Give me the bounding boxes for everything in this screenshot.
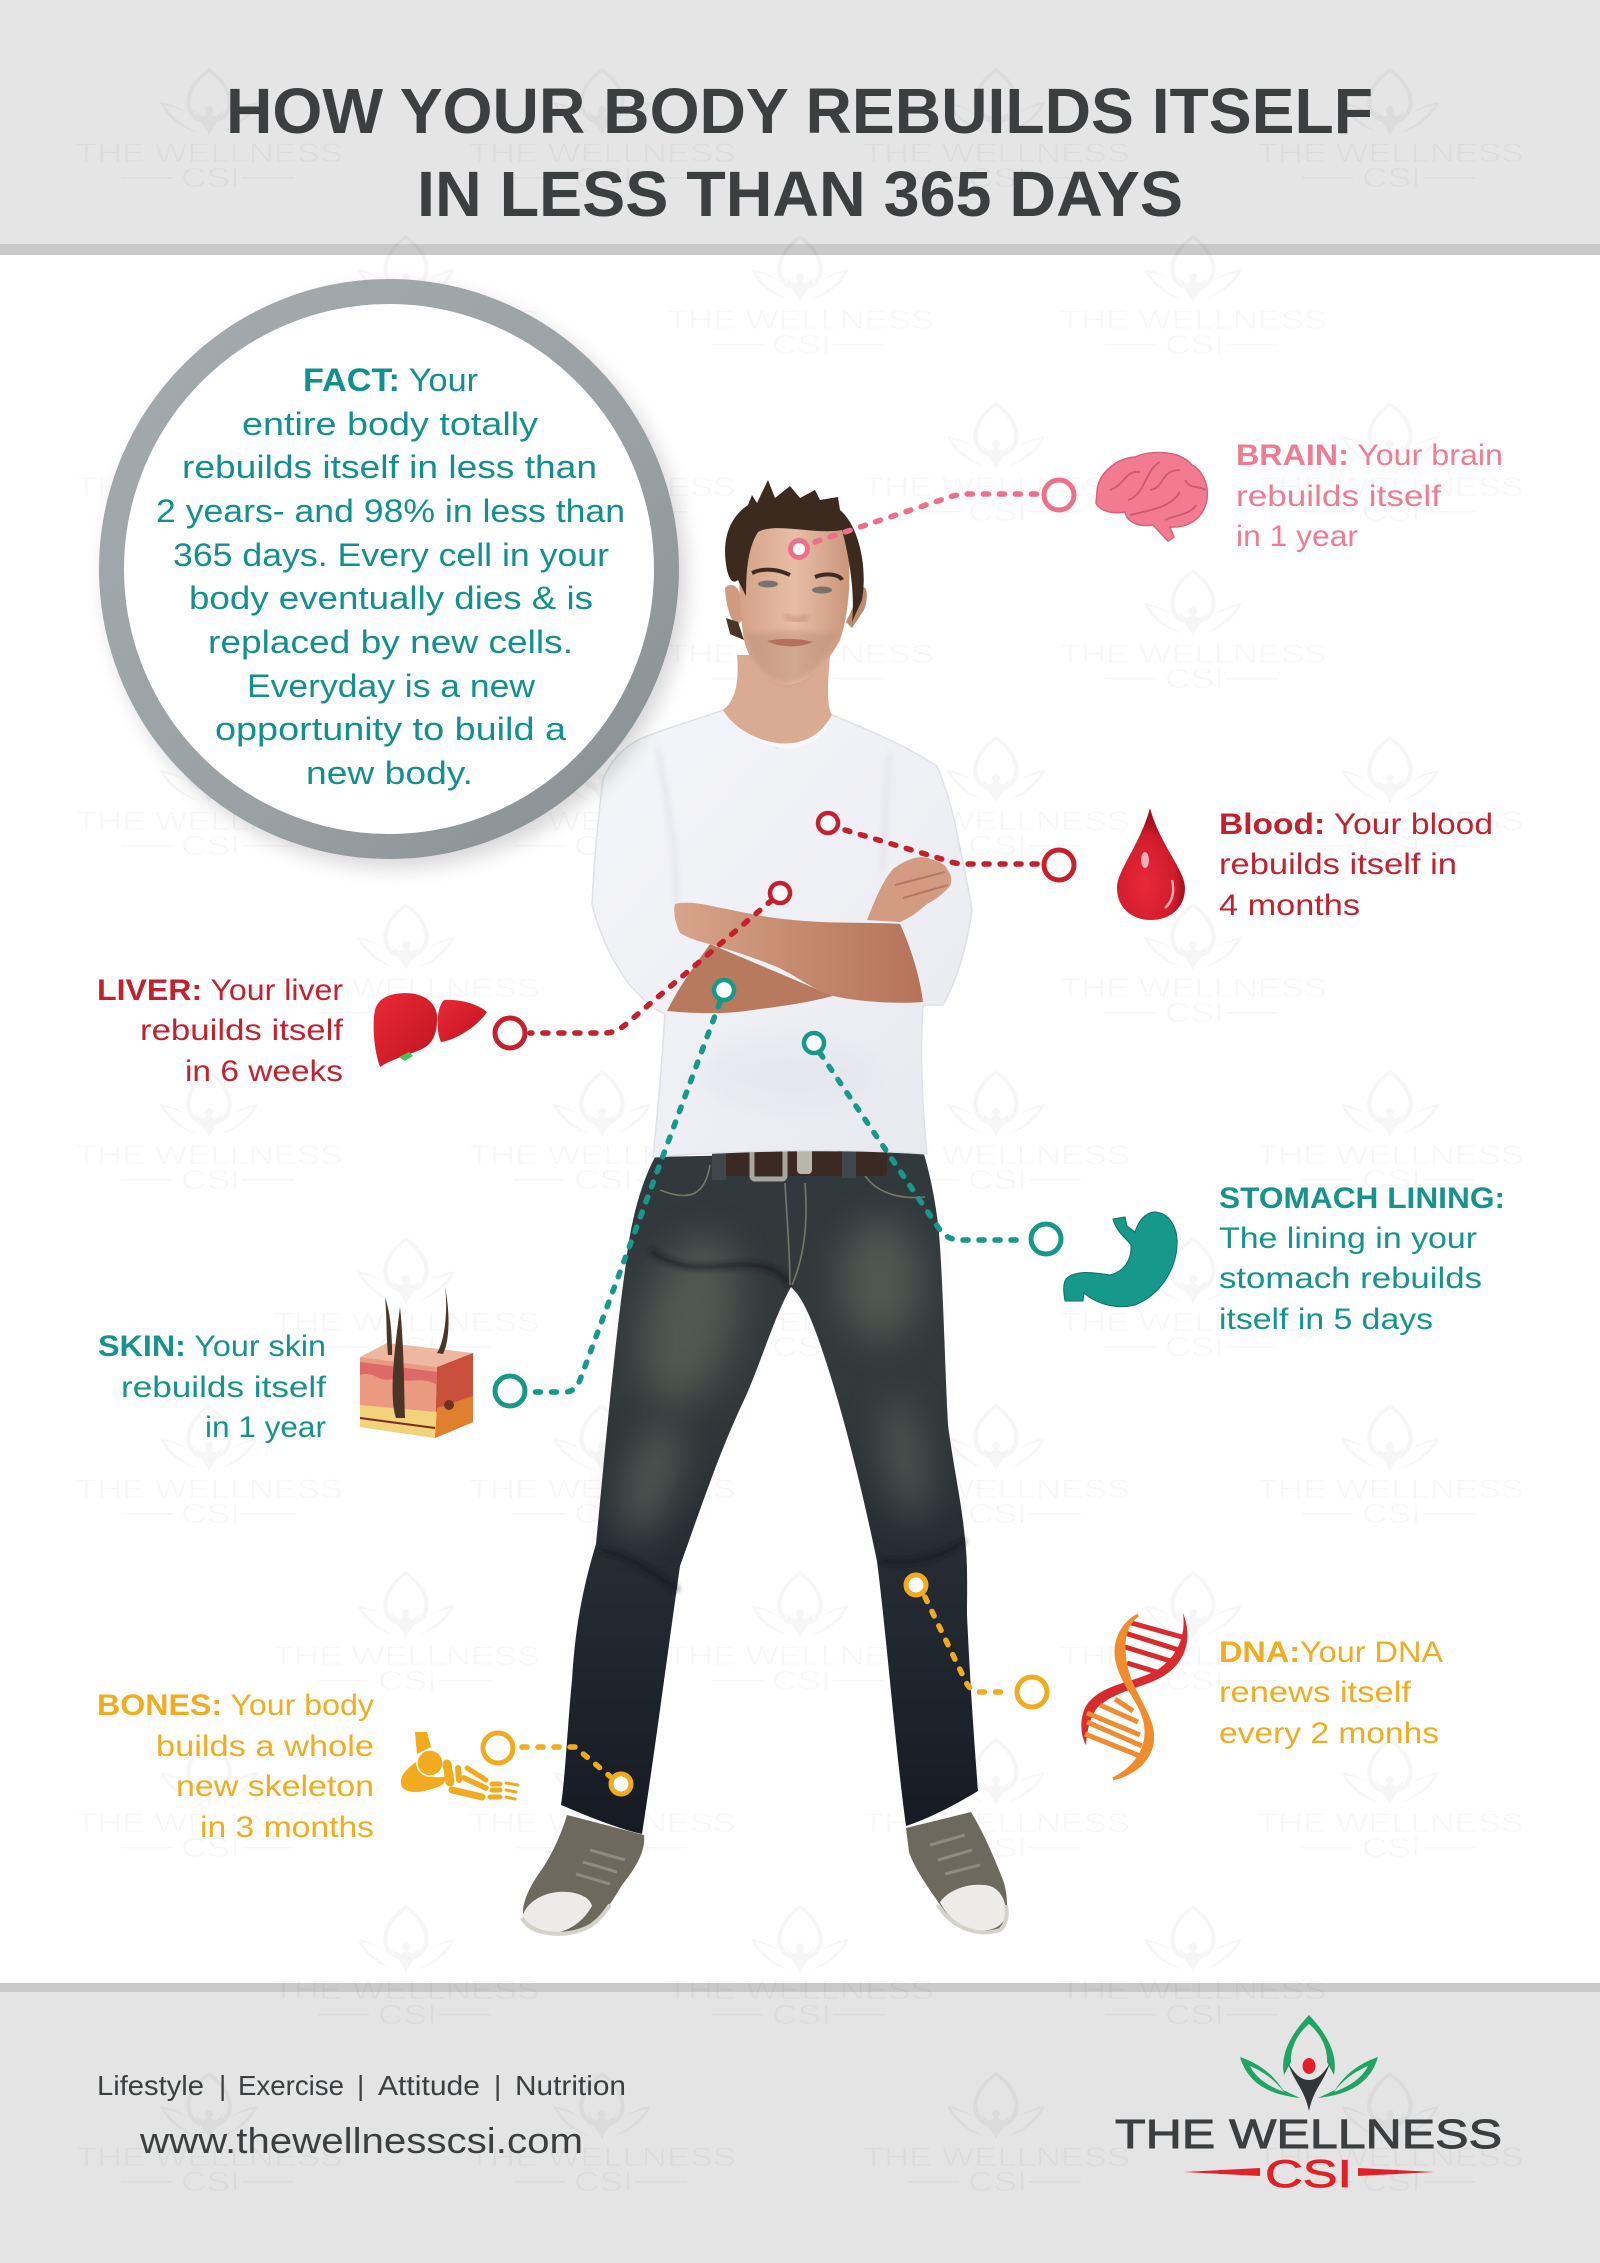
watermark pattern: THE WELLNESS: [667, 305, 934, 335]
stomach label: STOMACH LINING:: [1219, 1182, 1505, 1215]
watermark pattern: THE WELLNESS: [273, 973, 540, 1003]
watermark pattern: CSI: [772, 329, 831, 360]
watermark pattern: CSI: [1165, 1999, 1224, 2030]
footer tagline: Attitude: [378, 2070, 480, 2101]
skin label: rebuilds itself: [121, 1371, 327, 1404]
logo csi: [1184, 2153, 1434, 2196]
watermark pattern: CSI: [1362, 1832, 1421, 1863]
watermark pattern: CSI: [574, 1832, 633, 1863]
skin label: in 1 year: [205, 1411, 326, 1444]
watermark pattern: CSI: [574, 162, 633, 193]
watermark pattern: THE WELLNESS: [863, 2142, 1130, 2172]
person photo illustration: [522, 480, 1007, 1934]
dna label: DNA:Your DNA: [1219, 1636, 1443, 1669]
watermark pattern: THE WELLNESS: [1060, 973, 1327, 1003]
blood connector: [818, 813, 1074, 880]
footer tagline: Lifestyle: [97, 2070, 204, 2101]
watermark pattern: CSI: [181, 2166, 240, 2197]
watermark pattern: THE WELLNESS: [667, 1641, 934, 1671]
watermark pattern: THE WELLNESS: [76, 1808, 343, 1838]
watermark pattern: CSI: [574, 2166, 633, 2197]
blood label: [1219, 808, 1493, 922]
watermark pattern: CSI: [1362, 496, 1421, 527]
brain icon: [1096, 452, 1207, 541]
liver label: [97, 974, 344, 1088]
watermark pattern: THE WELLNESS: [273, 1641, 540, 1671]
watermark pattern: THE WELLNESS: [863, 1474, 1130, 1504]
watermark pattern: THE WELLNESS: [273, 1307, 540, 1337]
watermark pattern: CSI: [378, 663, 437, 694]
watermark pattern: THE WELLNESS: [76, 138, 343, 168]
fact text: new body.: [306, 755, 473, 791]
watermark pattern: THE WELLNESS: [1257, 1140, 1524, 1170]
watermark pattern: THE WELLNESS: [76, 1474, 343, 1504]
bones label: builds a whole: [156, 1730, 374, 1763]
watermark pattern: THE WELLNESS: [469, 1474, 736, 1504]
footer tagline: |: [219, 2070, 226, 2101]
brain label: [1236, 439, 1503, 553]
head: [725, 480, 867, 685]
fact text: [156, 362, 625, 791]
brows: [752, 570, 842, 580]
knee folds: [600, 1250, 965, 1590]
footer tagline: |: [357, 2070, 364, 2101]
watermark pattern: THE WELLNESS: [469, 2142, 736, 2172]
footer website: www.thewellnesscsi.com: [139, 2120, 583, 2161]
fact text: entire body totally: [242, 406, 538, 442]
liver label: LIVER: Your liver: [97, 974, 343, 1007]
watermark pattern: CSI: [772, 663, 831, 694]
watermark pattern: THE WELLNESS: [863, 1140, 1130, 1170]
stomach label: stomach rebuilds: [1219, 1262, 1482, 1295]
t-shirt: [592, 710, 972, 1157]
watermark pattern: CSI: [1362, 2166, 1421, 2197]
watermark pattern: CSI: [181, 162, 240, 193]
watermark pattern: CSI: [1362, 830, 1421, 861]
watermark pattern: THE WELLNESS: [273, 1975, 540, 2005]
watermark pattern: THE WELLNESS: [1060, 1307, 1327, 1337]
watermark pattern: THE WELLNESS: [1257, 472, 1524, 502]
brain label: rebuilds itself: [1236, 480, 1442, 513]
footer tagline: [97, 2070, 626, 2101]
watermark pattern: CSI: [968, 1164, 1027, 1195]
liver label: rebuilds itself: [140, 1014, 344, 1047]
right shoe: [906, 1812, 1007, 1933]
watermark pattern: CSI: [378, 329, 437, 360]
watermark pattern: CSI: [968, 1832, 1027, 1863]
dna connector: [906, 1575, 1047, 1707]
watermark pattern: THE WELLNESS: [1257, 806, 1524, 836]
blood drop icon: [1117, 808, 1185, 920]
title: HOW YOUR BODY REBUILDS ITSELF: [226, 75, 1373, 147]
brain label: in 1 year: [1236, 520, 1358, 553]
blood label: rebuilds itself in: [1219, 848, 1457, 881]
watermark pattern: CSI: [1165, 997, 1224, 1028]
belt: [712, 1144, 887, 1180]
dna label: every 2 monhs: [1219, 1717, 1439, 1750]
stomach label: [1219, 1182, 1505, 1336]
watermark pattern: CSI: [1165, 1331, 1224, 1362]
dna label: [1219, 1636, 1443, 1750]
watermark pattern: CSI: [1165, 1665, 1224, 1696]
mouth: [767, 639, 813, 646]
watermark pattern: THE WELLNESS: [667, 1307, 934, 1337]
watermark pattern: CSI: [181, 830, 240, 861]
stomach label: itself in 5 days: [1219, 1303, 1433, 1336]
stubble: [745, 630, 838, 684]
watermark pattern: THE WELLNESS: [469, 472, 736, 502]
watermark pattern: THE WELLNESS: [1257, 138, 1524, 168]
fact text: 365 days. Every cell in your: [173, 537, 609, 573]
dna label: renews itself: [1219, 1676, 1412, 1709]
footer tagline: Exercise: [238, 2070, 344, 2101]
skin connector: [495, 980, 734, 1406]
jeans: [561, 1151, 978, 1834]
watermark pattern: CSI: [378, 1665, 437, 1696]
footer band: [0, 1983, 1600, 2263]
watermark pattern: CSI: [968, 2166, 1027, 2197]
blood label: 4 months: [1219, 889, 1360, 922]
watermark pattern: THE WELLNESS: [1257, 1808, 1524, 1838]
watermark pattern: THE WELLNESS: [863, 138, 1130, 168]
fact text: replaced by new cells.: [208, 624, 573, 660]
skin icon: [360, 1287, 473, 1438]
bones connector: [483, 1733, 631, 1794]
hair: [725, 480, 864, 622]
watermark pattern: CSI: [574, 1498, 633, 1529]
watermark pattern: CSI: [968, 162, 1027, 193]
left shoe: [522, 1815, 644, 1934]
foot bones icon: [401, 1732, 518, 1799]
watermark pattern: CSI: [1362, 1164, 1421, 1195]
watermark pattern: THE WELLNESS: [667, 639, 934, 669]
crossed upper forearm: [674, 903, 923, 1003]
watermark pattern: CSI: [772, 1665, 831, 1696]
watermark pattern: CSI: [968, 496, 1027, 527]
watermark pattern: CSI: [772, 1999, 831, 2030]
hand: [867, 857, 951, 922]
watermark pattern: THE WELLNESS: [1060, 1641, 1327, 1671]
nose: [785, 615, 808, 620]
fact circle: [106, 288, 686, 868]
brain label: BRAIN: Your brain: [1236, 439, 1503, 472]
title: [226, 75, 1373, 230]
watermark pattern: CSI: [1165, 663, 1224, 694]
watermark pattern: CSI: [378, 997, 437, 1028]
brand logo: [1115, 2015, 1502, 2196]
watermark pattern: THE WELLNESS: [1060, 1975, 1327, 2005]
brain connector: [788, 480, 1074, 560]
fact text: body eventually dies & is: [189, 580, 593, 616]
watermark pattern: THE WELLNESS: [1060, 639, 1327, 669]
logo wordmark: THE WELLNESS: [1115, 2111, 1502, 2157]
title: IN LESS THAN 365 DAYS: [417, 158, 1183, 230]
watermark pattern: THE WELLNESS: [1060, 305, 1327, 335]
fact text: opportunity to build a: [215, 711, 566, 747]
fact text: Everyday is a new: [247, 668, 536, 704]
watermark pattern: THE WELLNESS: [273, 305, 540, 335]
liver label: in 6 weeks: [185, 1055, 343, 1088]
watermark pattern: THE WELLNESS: [469, 806, 736, 836]
watermark pattern: CSI: [968, 1498, 1027, 1529]
jeans seams: [660, 1165, 925, 1285]
watermark pattern: THE WELLNESS: [863, 806, 1130, 836]
watermark pattern: CSI: [772, 997, 831, 1028]
watermark pattern: CSI: [181, 1832, 240, 1863]
stomach connector: [804, 1033, 1061, 1254]
watermark pattern: CSI: [1362, 1498, 1421, 1529]
watermark pattern: THE WELLNESS: [469, 1808, 736, 1838]
watermark pattern: THE WELLNESS: [76, 806, 343, 836]
eyes: [758, 580, 778, 588]
watermark pattern: CSI: [1165, 329, 1224, 360]
denim fade patches: [607, 1220, 935, 1545]
watermark pattern: CSI: [574, 496, 633, 527]
watermark pattern: THE WELLNESS: [1257, 2142, 1524, 2172]
watermark pattern: THE WELLNESS: [863, 472, 1130, 502]
dna icon: [1081, 1613, 1187, 1779]
watermark pattern: THE WELLNESS: [76, 2142, 343, 2172]
watermark pattern: THE WELLNESS: [76, 472, 343, 502]
header band: [0, 0, 1600, 255]
logo figure: [1288, 2058, 1330, 2111]
watermark pattern: CSI: [1362, 162, 1421, 193]
bones label: BONES: Your body: [97, 1689, 374, 1722]
watermark pattern: CSI: [574, 830, 633, 861]
logo leaves: [1240, 2015, 1378, 2098]
lower forearm: [667, 944, 833, 1013]
watermark pattern: THE WELLNESS: [76, 1140, 343, 1170]
watermark pattern: CSI: [378, 1999, 437, 2030]
bones label: [97, 1689, 374, 1844]
skin label: SKIN: Your skin: [98, 1330, 326, 1363]
skin label: [98, 1330, 327, 1444]
footer tagline: |: [494, 2070, 501, 2101]
blood label: Blood: Your blood: [1219, 808, 1493, 841]
watermark pattern: CSI: [181, 496, 240, 527]
bones label: in 3 months: [200, 1811, 374, 1844]
watermark pattern: THE WELLNESS: [667, 973, 934, 1003]
watermark pattern: THE WELLNESS: [667, 1975, 934, 2005]
watermark pattern: CSI: [181, 1498, 240, 1529]
stomach icon: [1064, 1212, 1177, 1307]
watermark pattern: CSI: [968, 830, 1027, 861]
logo csi: CSI: [1265, 2153, 1352, 2196]
watermark pattern: THE WELLNESS: [1257, 1474, 1524, 1504]
liver connector: [495, 883, 790, 1048]
watermark pattern: THE WELLNESS: [273, 639, 540, 669]
watermark pattern: THE WELLNESS: [863, 1808, 1130, 1838]
watermark pattern: CSI: [181, 1164, 240, 1195]
watermark pattern: CSI: [772, 1331, 831, 1362]
neck: [723, 655, 832, 744]
footer tagline: Nutrition: [515, 2070, 626, 2101]
fact text: FACT: Your: [303, 362, 478, 398]
watermark pattern: THE WELLNESS: [469, 1140, 736, 1170]
stomach label: The lining in your: [1219, 1222, 1477, 1255]
fact text: 2 years- and 98% in less than: [156, 493, 625, 529]
bones label: new skeleton: [176, 1770, 374, 1803]
watermark pattern: CSI: [378, 1331, 437, 1362]
liver icon: [374, 993, 487, 1067]
watermark pattern: CSI: [574, 1164, 633, 1195]
watermark pattern: THE WELLNESS: [469, 138, 736, 168]
fact text: rebuilds itself in less than: [182, 449, 597, 485]
